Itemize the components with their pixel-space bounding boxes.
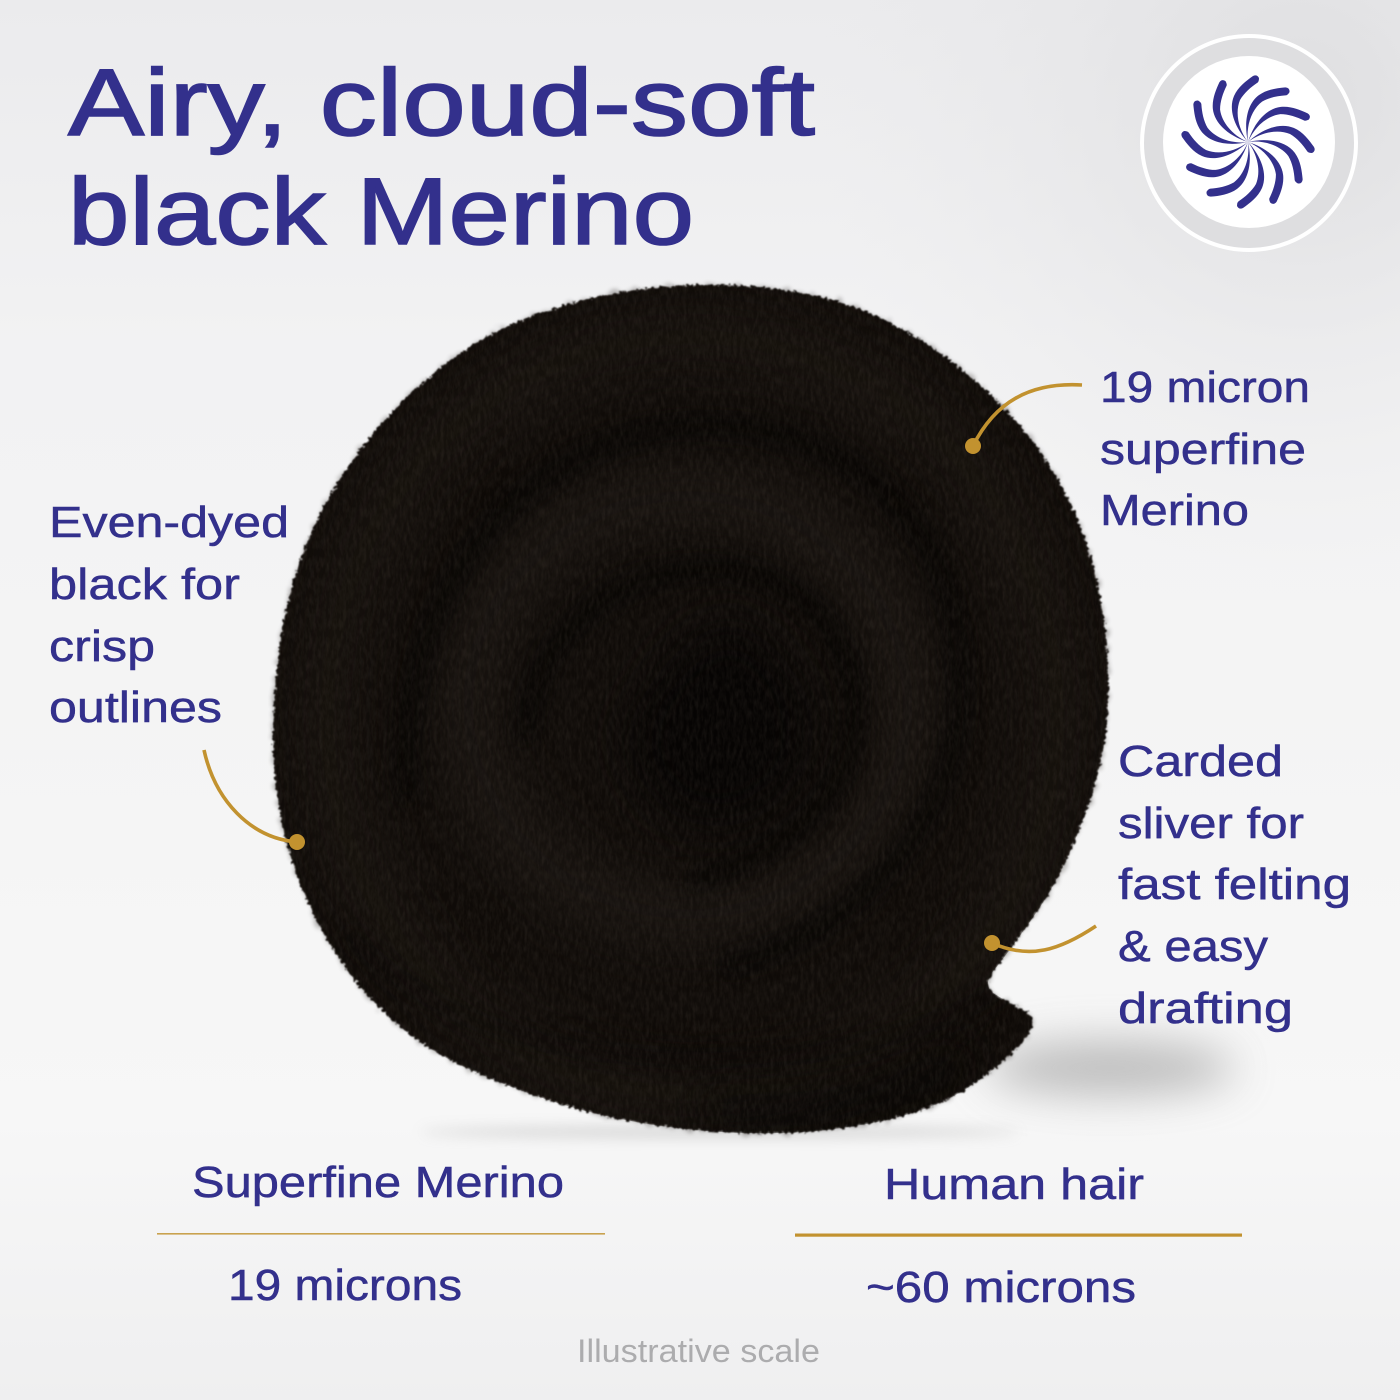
title [68, 50, 815, 265]
callout: even-dyed black: outlines [49, 683, 222, 732]
title: black Merino [68, 159, 694, 265]
callout: carded sliver: fast felting [1118, 860, 1351, 909]
callout: carded sliver: sliver for [1118, 799, 1304, 848]
callout: even-dyed black: Even-dyed [49, 498, 289, 547]
callout: 19 micron superfine Merino: 19 micron [1100, 363, 1310, 412]
logo badge [1142, 36, 1356, 250]
callout: 19 micron superfine Merino [965, 363, 1310, 535]
scale: superfine Merino: 19 microns [228, 1261, 462, 1310]
callout: carded sliver: & easy [1118, 922, 1268, 971]
callout: even-dyed black [49, 498, 305, 850]
callout: carded sliver: drafting [1118, 984, 1293, 1033]
scale: human hair [795, 1160, 1242, 1312]
title: Airy, cloud-soft [68, 50, 815, 156]
scale: superfine Merino: Superfine Merino [192, 1158, 564, 1207]
scale: human hair: ~60 microns [866, 1263, 1136, 1312]
scale: human hair: Human hair [884, 1160, 1144, 1209]
floor shadow [420, 1042, 1235, 1137]
scale: superfine Merino [157, 1158, 605, 1310]
callout: 19 micron superfine Merino: superfine [1100, 425, 1306, 474]
footnote: Illustrative scale [577, 1333, 820, 1369]
callout: carded sliver [984, 737, 1351, 1033]
wool roll [256, 266, 1144, 1154]
callout: 19 micron superfine Merino: Merino [1100, 486, 1249, 535]
callout: even-dyed black: black for [49, 560, 240, 609]
icon: swirl [1181, 75, 1315, 209]
callout: even-dyed black: crisp [49, 622, 155, 671]
callout: carded sliver: Carded [1118, 737, 1283, 786]
